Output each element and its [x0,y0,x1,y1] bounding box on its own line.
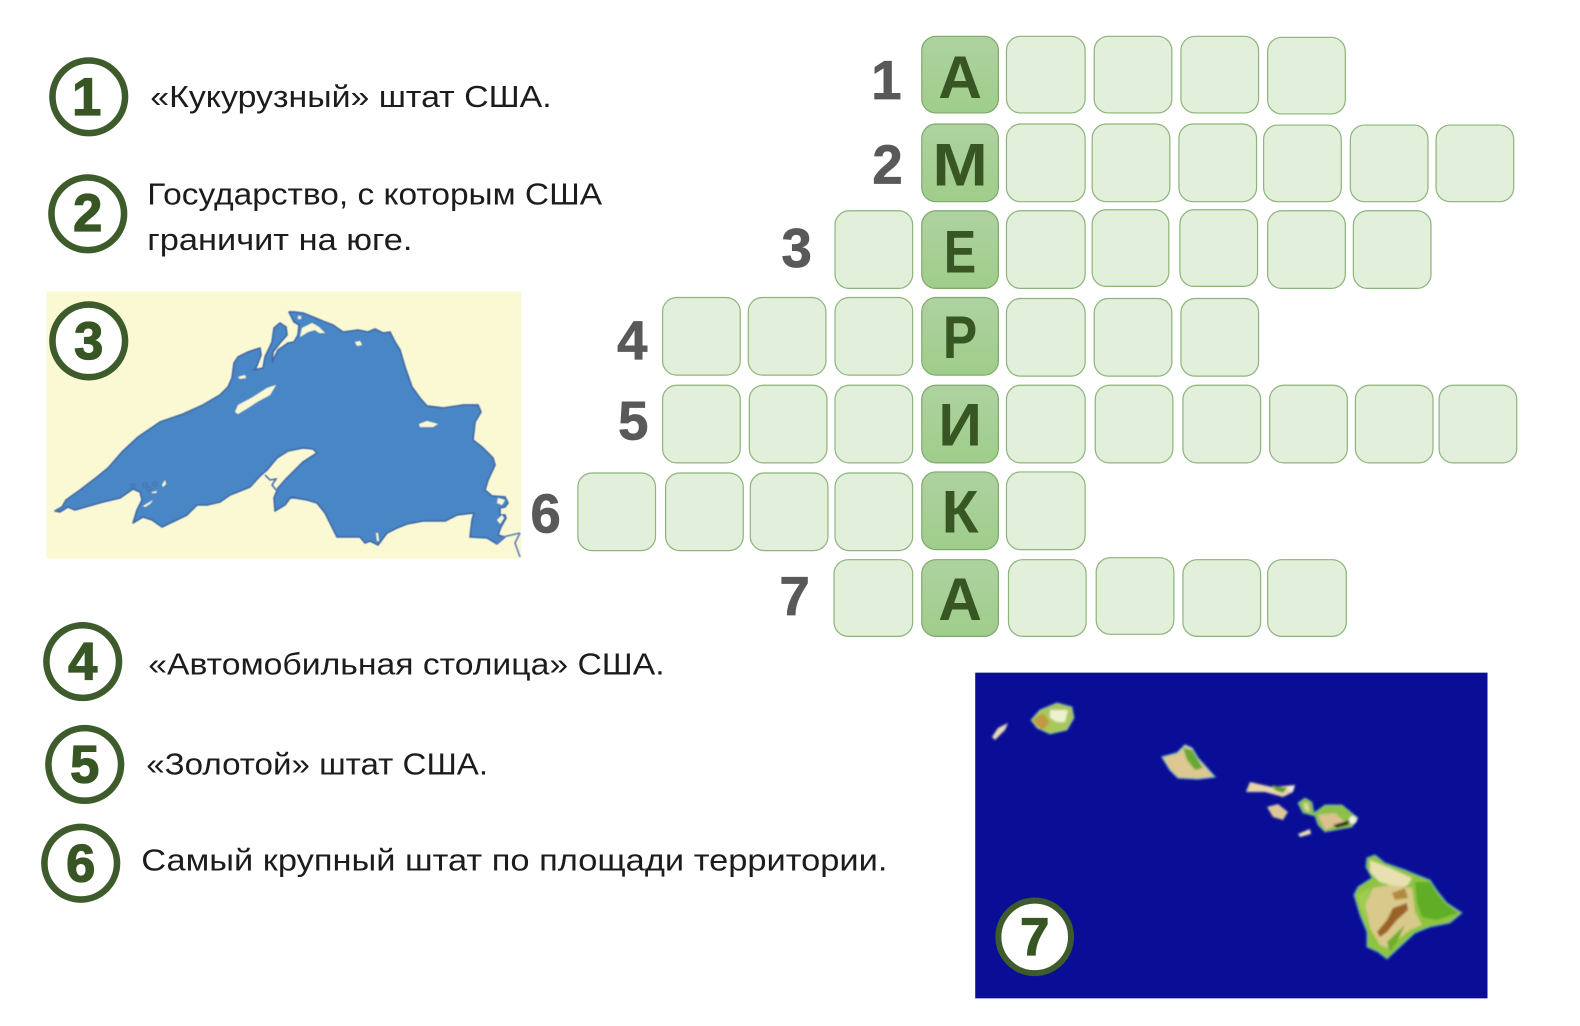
clue 1 [52,61,552,133]
clue 1 text: «Кукурузный» штат США. [150,79,552,114]
highlighted letter cell Р [922,297,998,375]
number badge 6 [44,827,117,900]
highlighted letter cell Р: Р [943,303,977,371]
clue 2 text: граничит на юге. [147,222,412,257]
clue 6 text: Самый крупный штат по площади территории. [141,842,887,877]
answer cells row 6 [578,472,1085,551]
number badge 2: 2 [73,185,102,243]
number badge 7 [998,901,1071,973]
row number 5: 5 [618,391,648,452]
Hawaiian islands [992,703,1462,959]
clue 2 text [147,177,603,257]
Big Island outline (base) [1354,855,1462,959]
highlighted letter cell И: И [938,391,982,459]
number badge 5: 5 [70,737,99,795]
row number 7: 7 [780,566,810,627]
highlighted letter cell И [922,385,998,463]
highlighted letter cell Е [922,211,998,288]
answer cells row 1 [1006,36,1345,114]
map background [46,291,521,559]
highlighted letter cell А: А [938,565,982,633]
number badge 4: 4 [68,634,97,692]
number badge 3: 3 [74,313,103,371]
number badge 7: 7 [1020,909,1049,967]
number badge 2 [51,177,124,250]
answer cells row 2 [1006,124,1514,202]
clue 6 [44,827,887,900]
ocean background [975,673,1487,998]
crossword grid [530,36,1517,636]
crossword row 5 [618,385,1517,463]
answer cells row 3 [835,210,1431,288]
row number 3: 3 [782,218,812,279]
highlighted letter cell К [922,472,998,550]
lake shape [55,312,520,557]
highlighted letter cell А: А [938,43,982,111]
answer cells row 7 [834,558,1346,636]
clue 2 text: Государство, с которым США [147,177,603,212]
crossword row 7 [780,558,1346,636]
number badge 1: 1 [72,69,101,127]
highlighted letter cell А [922,560,998,636]
clue 3: map of Lake Superior [46,291,521,559]
crossword row 2 [872,124,1514,202]
number badge 4 [46,625,119,698]
clue 4 [46,625,665,698]
row number 4: 4 [617,310,647,371]
highlighted letter cell Е: Е [944,217,976,285]
highlighted letter cell А [922,36,998,113]
answer cells row 4 [663,297,1259,376]
clue 5 text: «Золотой» штат США. [146,746,488,781]
number badge 3 [52,305,125,377]
row number 2: 2 [872,135,903,196]
crossword row 3 [782,210,1431,288]
crossword row 4 [617,297,1259,376]
highlighted letter cell М [922,124,998,202]
number badge 5 [48,728,121,801]
crossword row 6 [530,472,1085,551]
row number 6: 6 [530,483,561,544]
clue 7: satellite map of Hawaii [975,673,1487,998]
row number 1: 1 [871,50,902,111]
answer cells row 5 [663,385,1517,463]
clue 2 [51,177,603,257]
number badge 1 [52,61,125,133]
clue 5 [48,728,488,801]
highlighted letter cell М: М [932,131,988,199]
number badge 6: 6 [66,835,95,893]
highlighted letter cell К: К [942,477,980,545]
crossword row 1 [871,36,1345,114]
clue 4 text: «Автомобильная столица» США. [148,647,665,682]
